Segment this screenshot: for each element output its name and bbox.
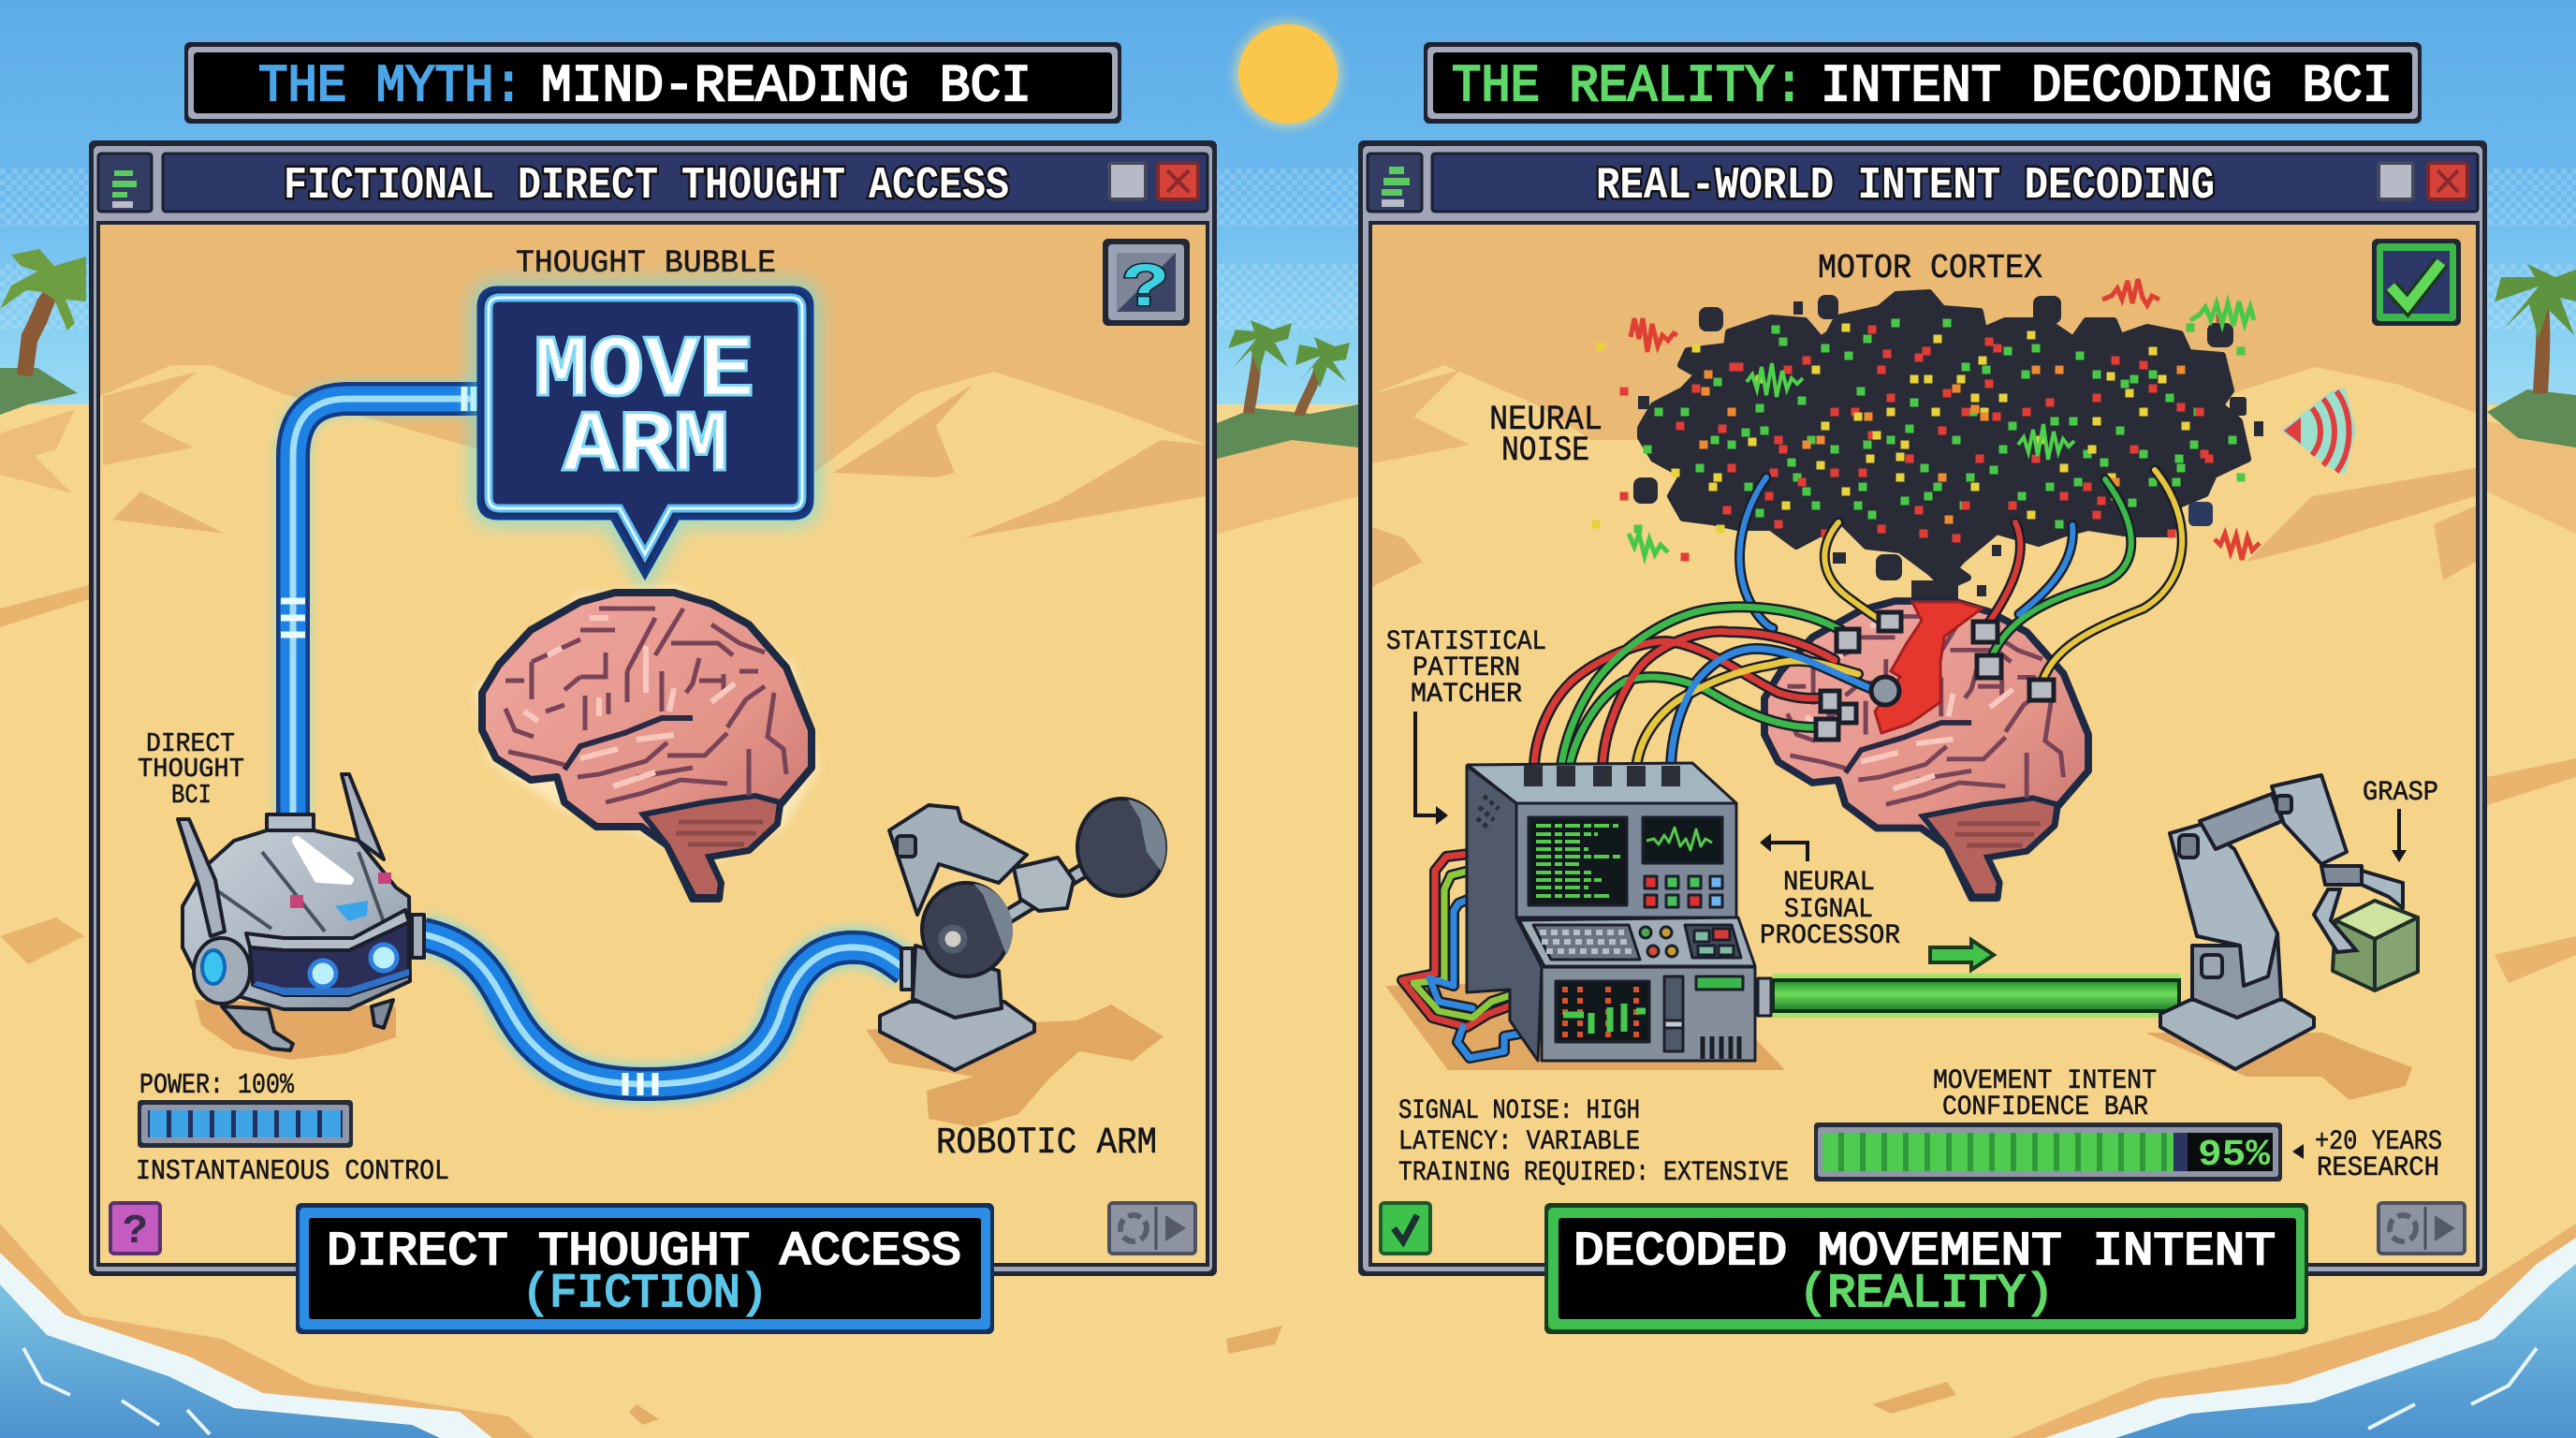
label: direct thought bci: DIRECT [146,728,235,759]
icon: check box [2372,239,2461,326]
label: statistical pattern matcher [1386,626,1546,711]
label: 20 years research [2315,1126,2442,1184]
window frame [89,140,1217,1276]
icon: sun [1234,20,1342,128]
arrow: to machine [1760,833,1808,861]
green signal pipe [1773,974,2181,1018]
window frame [1358,140,2487,1276]
title: the reality [1424,42,2422,124]
icon: window menu [112,170,137,208]
label: neural signal processor [1760,867,1900,952]
stats list: SIGNAL NOISE: HIGH [1398,1095,1640,1127]
ring connector [1871,677,1899,705]
power status [136,1069,449,1188]
window title: REAL-WORLD INTENT DECODING [1596,161,2215,212]
caption: decoded movement intent: (REALITY) [1799,1268,2054,1321]
wires: machine to brain [1534,607,1877,774]
icon: nav buttons [2378,1203,2465,1254]
icon: green check [1381,1203,1430,1254]
label: statistical pattern matcher: MATCHER [1411,679,1522,711]
motor cortex highlight [1875,602,1982,733]
icon: window menu [1382,167,1410,207]
icon: nav buttons [1109,1203,1195,1254]
caption: direct thought access: (FICTION) [522,1268,768,1321]
label: grasp: GRASP [2363,777,2438,809]
arrow: to processor [1415,712,1448,825]
label: statistical pattern matcher: STATISTICAL [1386,626,1546,658]
window buttons [1109,163,1198,199]
robotic arm: grasp [2160,775,2403,1069]
label: thought bubble: THOUGHT BUBBLE [516,246,776,282]
arrow: green direction [1930,940,1994,970]
stats list [1398,1095,1789,1189]
icon: purple question [110,1203,160,1255]
pipe: bubble to headset [281,387,479,816]
power status: POWER: 100% [139,1069,294,1102]
label: confidence bar [1933,1065,2157,1123]
label: neural noise: NEURAL [1489,401,1603,440]
caption: direct thought access: DIRECT THOUGHT ACCESS [327,1225,961,1279]
label: neural signal processor: NEURAL [1783,867,1875,899]
background: palm left [0,249,86,415]
background: sea left [0,1224,534,1438]
robotic arm: fiction [880,799,1166,1070]
arrow: grasp [2392,809,2407,862]
content background [98,223,1208,1265]
title: the myth [184,42,1121,124]
panel: fictional direct thought access [89,140,1217,1276]
brain: motor cortex [1764,601,2088,898]
confidence bar: 95% [2198,1135,2271,1177]
arrow: research pointer [2292,1144,2304,1159]
caption: decoded movement intent [1544,1203,2308,1334]
label: 20 years research: +20 YEARS [2315,1126,2442,1158]
stats list: TRAINING REQUIRED: EXTENSIVE [1398,1157,1789,1189]
electrode connectors [1816,612,2054,740]
robot shadow [866,1005,1164,1127]
helmet shadow [195,1000,396,1060]
brain: fiction [482,593,812,899]
gripper claw [2314,889,2356,952]
caption: decoded movement intent: DECODED MOVEMENT INTENT [1573,1225,2276,1279]
background: sea right [2011,1224,2576,1438]
label: neural signal processor: PROCESSOR [1760,920,1900,952]
thought bubble: move arm [479,288,812,576]
label: neural noise: NOISE [1501,432,1589,471]
background: palm right [2487,264,2576,448]
background: beach [0,404,2576,1438]
label: motor cortex: MOTOR CORTEX [1818,249,2042,287]
cable tangle [1402,854,1526,1058]
label: statistical pattern matcher: PATTERN [1412,653,1520,684]
content background [1370,223,2478,1265]
icon: signal waves [2281,388,2356,475]
neural noise cloud [1596,293,2263,605]
label: 20 years research: RESEARCH [2317,1152,2439,1184]
background: palms centre [1217,320,1358,459]
caption: direct thought access [296,1203,994,1334]
title: the myth: MIND-READING BCI [541,56,1032,116]
machine shadow [1385,983,1785,1070]
noise waveforms [1629,279,2260,560]
thought bubble: move arm: MOVE [534,323,754,422]
window buttons [2378,163,2467,199]
label: confidence bar: MOVEMENT INTENT [1933,1065,2157,1097]
cube [2333,901,2418,990]
label: neural signal processor: SIGNAL [1784,894,1873,926]
thought bubble: move arm: ARM [563,398,729,497]
robot shadow [2145,1033,2412,1100]
label: robotic arm: ROBOTIC ARM [936,1123,1157,1165]
cable: headset to arm [423,934,906,1095]
label: direct thought bci: THOUGHT [138,754,244,785]
window title: FICTIONAL DIRECT THOUGHT ACCESS [284,161,1009,212]
background: sky [0,0,2576,449]
icon: question box [1103,239,1190,326]
label: direct thought bci [138,728,244,811]
confidence bar [1814,1123,2282,1181]
title: the reality: THE REALITY: [1452,56,1804,116]
icon: purple question: ? [123,1209,148,1255]
headset [178,774,424,1050]
wires: cloud to brain [1740,470,2182,688]
panel: real-world intent decoding [1358,140,2487,1276]
stats list: LATENCY: VARIABLE [1398,1126,1640,1158]
label: confidence bar: CONFIDENCE BAR [1942,1092,2148,1123]
label: direct thought bci: BCI [171,780,212,811]
neural signal processor [1467,763,1771,1061]
title: the reality: INTENT DECODING BCI [1821,56,2393,116]
title: the myth: THE MYTH: [258,56,523,116]
icon: question box: ? [1122,254,1169,324]
background: dither bands [0,169,2576,330]
power status: INSTANTANEOUS CONTROL [136,1155,449,1188]
label: neural noise [1489,401,1603,471]
